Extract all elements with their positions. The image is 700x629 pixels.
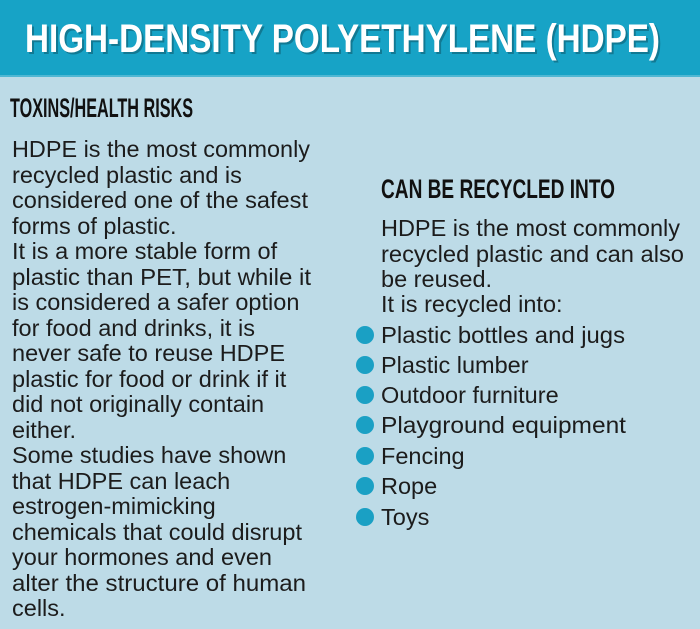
bullet list xyxy=(356,322,626,530)
text block: toxins body: considered one of the safest xyxy=(12,187,308,213)
bullet list: Plastic lumber xyxy=(381,352,529,378)
text block: toxins body: cells. xyxy=(12,595,66,621)
text block: recycled intro: recycled plastic and can also xyxy=(381,241,684,267)
text block: toxins body: that HDPE can leach xyxy=(12,468,230,494)
text block: toxins body: HDPE is the most commonly xyxy=(12,136,310,162)
text block: toxins body: chemicals that could disrupt xyxy=(12,519,302,545)
text block: toxins body: did not originally contain xyxy=(12,391,264,417)
text block: recycled intro: be reused. xyxy=(381,266,492,292)
text block: toxins body: plastic than PET, but while it xyxy=(12,264,311,290)
text block: toxins body xyxy=(12,136,311,621)
text block: toxins body: your hormones and even xyxy=(12,544,272,570)
heading: toxins: TOXINS/HEALTH RISKS xyxy=(10,93,193,123)
text block: toxins body: alter the structure of human xyxy=(12,570,306,596)
text block: toxins body: recycled plastic and is xyxy=(12,162,242,188)
bullet list: Toys xyxy=(381,504,429,530)
bullet list: Outdoor furniture xyxy=(381,382,559,408)
bullet list: Plastic bottles and jugs xyxy=(381,322,625,348)
text block: toxins body: It is a more stable form of xyxy=(12,238,278,264)
text block: recycled intro: HDPE is the most commonly xyxy=(381,215,680,241)
text block: toxins body: plastic for food or drink if it xyxy=(12,366,287,392)
text block: toxins body: forms of plastic. xyxy=(12,213,177,239)
bullet list: Fencing xyxy=(381,443,465,469)
text block: recycled intro: It is recycled into: xyxy=(381,291,563,317)
text block: toxins body: for food and drinks, it is xyxy=(12,315,255,341)
text block: toxins body: estrogen-mimicking xyxy=(12,493,216,519)
text block: toxins body: is considered a safer option xyxy=(12,289,299,315)
bullet list: Rope xyxy=(381,473,437,499)
panel: can be recycled into xyxy=(356,174,684,530)
panel: toxins/health risks xyxy=(10,93,311,621)
text block: toxins body: never safe to reuse HDPE xyxy=(12,340,285,366)
text block: recycled intro xyxy=(381,215,684,317)
text block: toxins body: Some studies have shown xyxy=(12,442,286,468)
text block: toxins body: either. xyxy=(12,417,76,443)
header band xyxy=(0,0,700,77)
bullet list: Playground equipment xyxy=(381,412,626,438)
